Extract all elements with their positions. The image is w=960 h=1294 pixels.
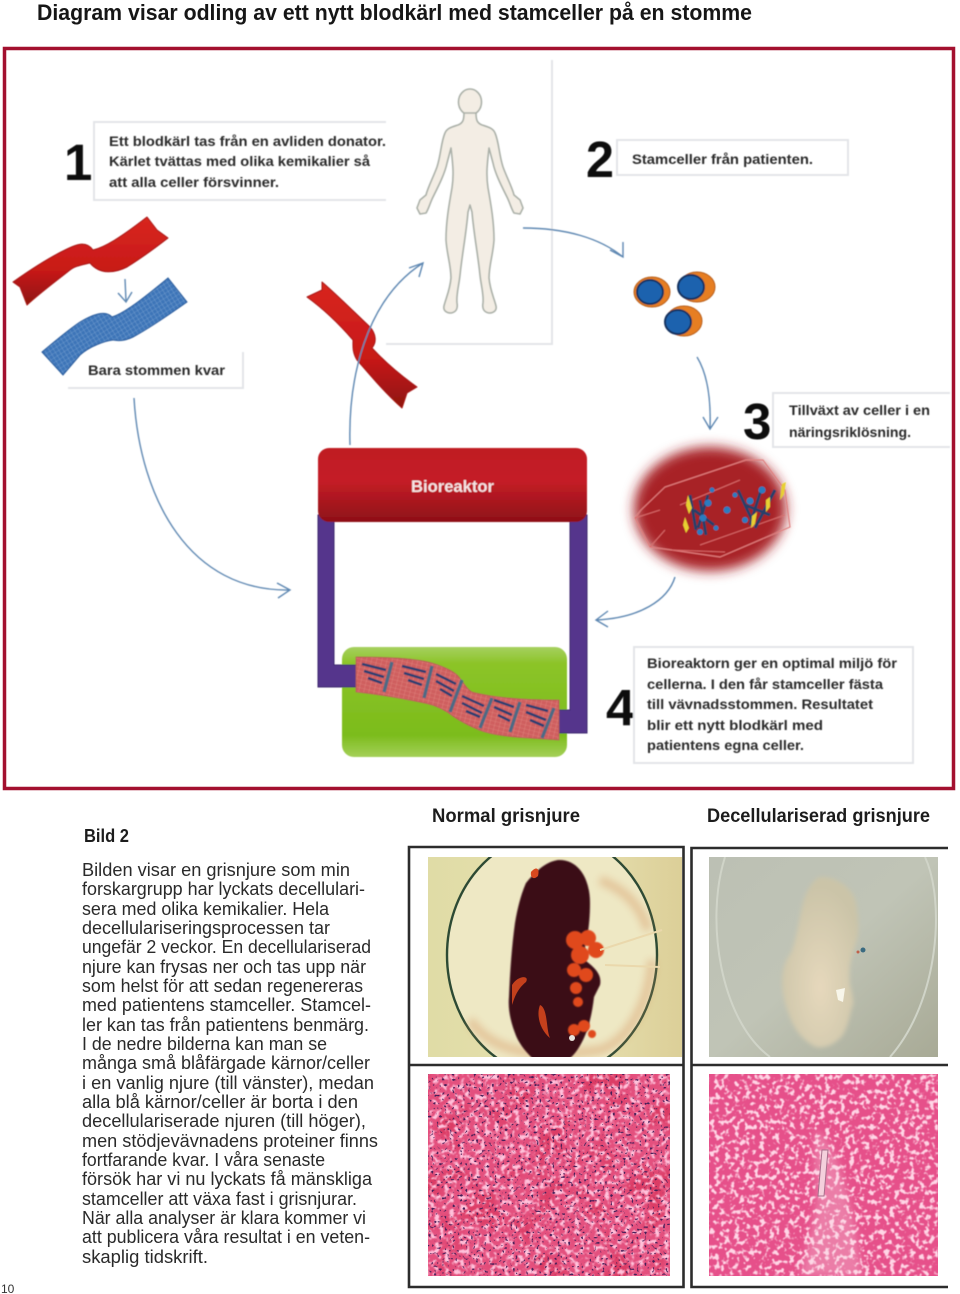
icon: stem cells [634, 272, 715, 336]
step 1 number: 1 [64, 134, 92, 191]
micrograph: decellularised kidney tissue [709, 1074, 938, 1276]
step 4 text box: Bioreaktorn ger en optimal miljö för [647, 655, 898, 671]
step 1 text box: att alla celler försvinner. [109, 174, 279, 190]
arrow: bioreactor to patient [350, 263, 423, 445]
text block: body copy: men stödjevävnadens proteiner finns [82, 1131, 378, 1151]
icon: human body box [386, 60, 552, 344]
text block: body copy: som helst för att sedan regenereras [82, 976, 363, 996]
step 1 text box: Kärlet tvättas med olika kemikalier så [109, 153, 370, 169]
step 4 number: 4 [606, 679, 636, 736]
scaffold label [68, 352, 243, 388]
heading: decellularised kidney: Decellulariserad grisnjure [707, 806, 930, 827]
text block: body copy: sera med olika kemikalier. Hela [82, 899, 330, 919]
text block: body copy: decellulariserade njuren (till höger), [82, 1111, 366, 1131]
text block: body copy: fortfarande kvar. I våra senaste [82, 1150, 325, 1170]
micrograph: normal kidney tissue [428, 1074, 670, 1276]
text block: body copy: forskargrupp har lyckats decellulari- [82, 879, 365, 899]
text block: body copy: alla blå kärnor/celler är borta i den [82, 1092, 358, 1112]
arrow: stem cells to culture [697, 357, 718, 429]
step 2 number: 2 [586, 131, 614, 188]
icon: red blood vessel [13, 217, 168, 305]
icon: bioreactor [318, 448, 587, 757]
text block: body copy: med patientens stamceller. Stamcel- [82, 995, 371, 1015]
text block: body copy: att publicera våra resultat i en veten- [82, 1227, 370, 1247]
engineered vessel [356, 657, 559, 740]
arrow: scaffold to bioreactor [134, 398, 290, 598]
heading: Bild 2: Bild 2 [84, 826, 129, 846]
step 3 number: 3 [743, 393, 771, 450]
step 4 text box: blir ett nytt blodkärl med [647, 717, 823, 733]
step 3 text box: näringsriklösning. [789, 424, 911, 440]
step 4 text box: till vävnadsstommen. Resultatet [647, 696, 873, 712]
step 2 text box: Stamceller från patienten. [632, 151, 813, 167]
step 1 text box: Ett blodkärl tas från en avliden donator. [109, 133, 386, 149]
step 1 text box [94, 122, 386, 200]
scaffold label: Bara stommen kvar [88, 362, 226, 378]
text block: body copy: decellulariseringsprocessen tar [82, 918, 330, 938]
text block: body copy: ler kan tas från patientens benmärg. [82, 1015, 369, 1035]
text block: body copy: i en vanlig njure (till vänster), medan [82, 1073, 374, 1093]
step 4 text box: cellerna. I den får stamceller fästa [647, 676, 883, 692]
step 4 text box: patientens egna celler. [647, 737, 804, 753]
photo: decellularised kidney [709, 857, 938, 1057]
panel: diagram frame [4, 48, 954, 788]
arrow: vessel to scaffold [118, 279, 132, 302]
step 4 text box [634, 647, 913, 763]
icon: blue vessel scaffold [42, 278, 187, 375]
photo panel frames [409, 847, 948, 1287]
heading: normal kidney: Normal grisnjure [432, 806, 580, 827]
text block: body copy: ungefär 2 veckor. En decellulariserad [82, 937, 371, 957]
bioreactor green chamber [342, 647, 567, 757]
text block: body copy: När alla analyser är klara kommer vi [82, 1208, 366, 1228]
text block: body copy: försök har vi nu lyckats få mänskliga [82, 1169, 373, 1189]
photo: normal kidney [428, 857, 682, 1057]
step 2 text box [617, 140, 848, 175]
bioreactor header: Bioreaktor [411, 477, 494, 496]
text block: body copy: Bilden visar en grisnjure som min [82, 860, 350, 880]
bioreactor header [318, 448, 587, 522]
icon: culture dish with cells [634, 447, 790, 571]
text block: body copy: stamceller att växa fast i grisnjurar. [82, 1189, 357, 1209]
text block: body copy: I de nedre bilderna kan man se [82, 1034, 327, 1054]
step 3 text box [773, 393, 950, 447]
title: Diagram visar odling av ett nytt blodkärl med stamceller på en stomme [37, 0, 752, 25]
text block: body copy: skaplig tidskrift. [82, 1247, 208, 1267]
step 3 text box: Tillväxt av celler i en [789, 402, 930, 418]
text block: body copy [82, 860, 378, 1267]
text block: body copy: njure kan frysas ner och tas upp när [82, 957, 366, 977]
text block: body copy: många små blåfärgade kärnor/celler [82, 1053, 370, 1073]
arrow: culture to bioreactor [596, 577, 675, 627]
arrow: patient to stem cells [523, 228, 623, 257]
bioreactor purple tubes [318, 515, 587, 733]
icon: finished red vessel [307, 282, 417, 408]
